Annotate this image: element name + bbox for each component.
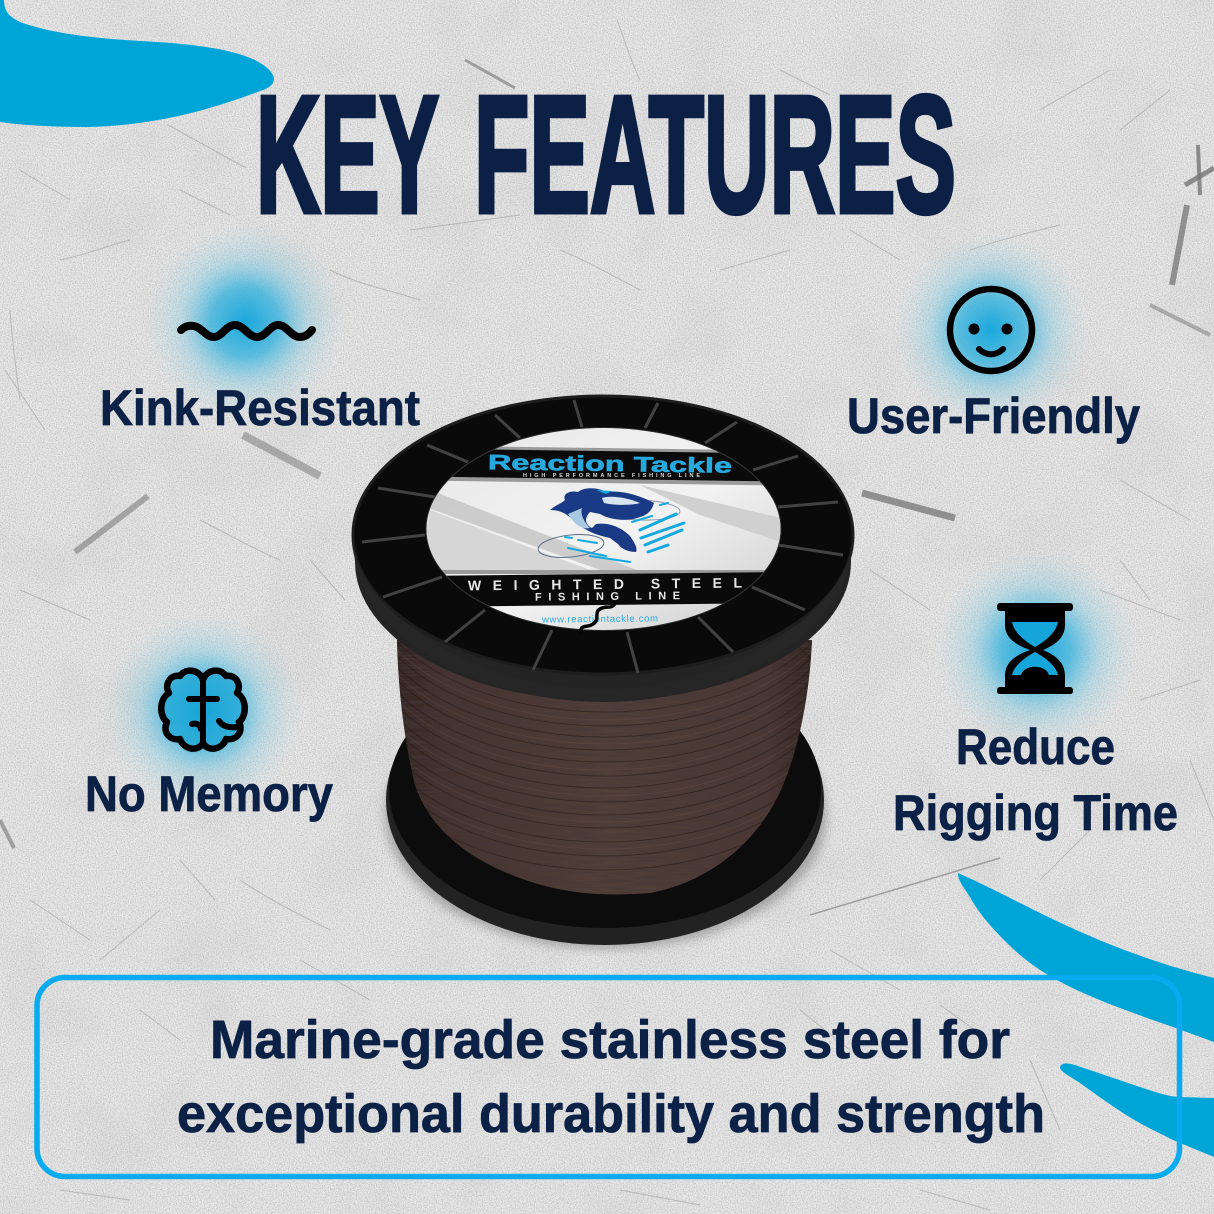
label: user-friendly: User-Friendly xyxy=(847,388,1140,444)
icon: leaping fish logo xyxy=(537,488,684,562)
spool shadow xyxy=(385,681,827,949)
product: fishing line spool xyxy=(353,390,853,949)
blue shape: bottom right swoosh xyxy=(958,873,1214,1157)
title xyxy=(256,62,956,248)
label text: website: www.reactiontackle.com xyxy=(541,613,658,626)
brown wound line xyxy=(397,640,812,894)
feature: kink-resistant xyxy=(100,224,420,436)
feature: no memory xyxy=(85,613,333,822)
label: reduce rigging time: Reduce xyxy=(956,719,1115,775)
title: KEY xyxy=(256,62,439,248)
icon: hourglass xyxy=(936,550,1136,750)
label: reduce rigging time xyxy=(893,719,1178,841)
callout text xyxy=(177,1010,1045,1144)
callout text: exceptional durability and strength xyxy=(177,1084,1045,1144)
feature: reduce rigging time xyxy=(893,550,1178,841)
label text: tagline: HIGH PERFORMANCE FISHING LINE xyxy=(523,473,700,479)
top flange xyxy=(353,396,853,702)
bottom flange xyxy=(386,652,824,945)
spool label xyxy=(426,427,782,631)
label text: product type: FISHING LINE xyxy=(535,590,680,604)
label: reduce rigging time: Rigging Time xyxy=(893,785,1178,841)
icon: wave line xyxy=(147,224,343,420)
label text: product name: WEIGHTED STEEL xyxy=(468,575,743,593)
label: kink-resistant: Kink-Resistant xyxy=(100,380,420,436)
icon: brain xyxy=(105,613,301,809)
feature: user-friendly xyxy=(847,234,1140,444)
blue shape: top left swoosh xyxy=(0,0,274,127)
label text: brand: Reaction Tackle xyxy=(488,451,732,478)
wavy line end xyxy=(581,603,615,632)
label: no memory: No Memory xyxy=(85,766,333,822)
callout text: Marine-grade stainless steel for xyxy=(210,1010,1010,1070)
callout box xyxy=(37,978,1180,1176)
icon: smiley face xyxy=(895,234,1087,426)
